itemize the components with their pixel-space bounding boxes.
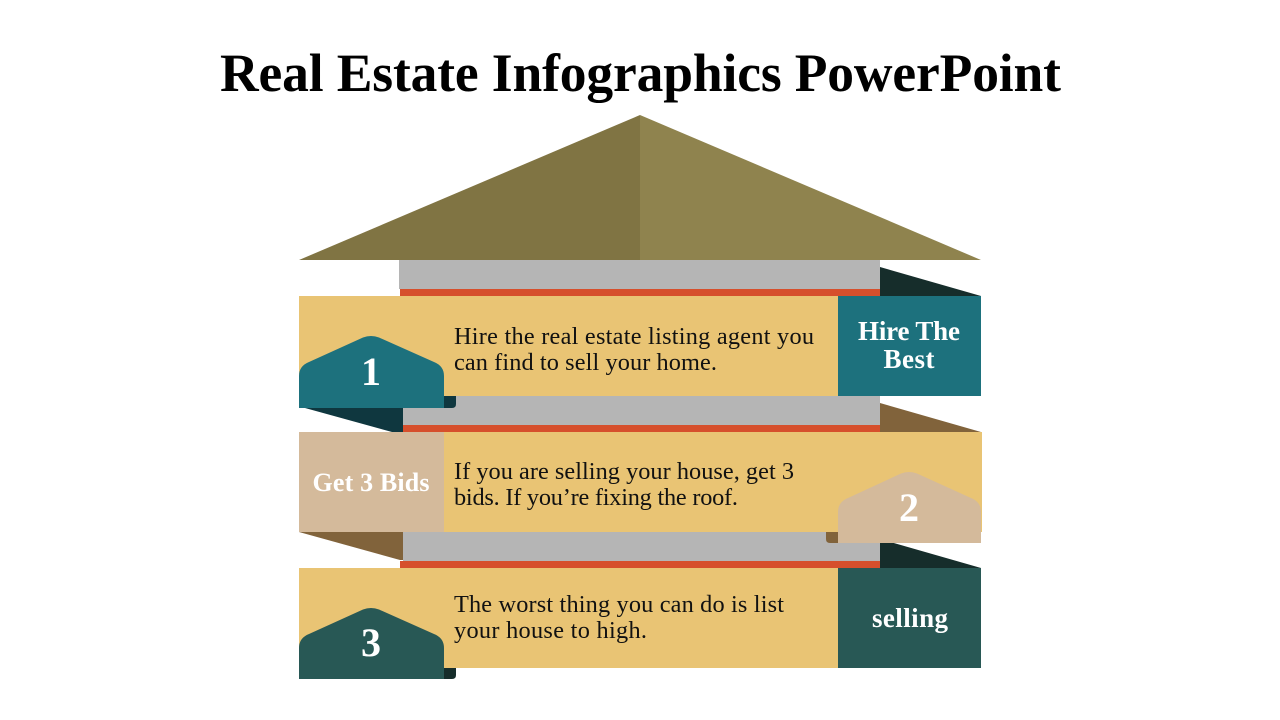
- wall section 1: [399, 260, 981, 296]
- ribbon band 1: [299, 296, 838, 396]
- step 3 description: [454, 591, 784, 644]
- label box: Get 3 Bids: Get 3 Bids: [312, 468, 430, 497]
- ribbon band 2: [444, 432, 982, 532]
- ribbon fold 1: [444, 396, 456, 408]
- label box: Hire The Best: Hire The: [858, 316, 960, 346]
- badge 3: [299, 608, 444, 679]
- ribbon fold 3: [444, 668, 456, 679]
- panel: step 3: [299, 568, 981, 679]
- step 2 description: bids. If you’re fixing the roof.: [454, 484, 738, 511]
- step 2 description: [454, 458, 794, 511]
- step 2 description: If you are selling your house, get 3: [454, 458, 794, 485]
- wall section 2: [305, 396, 981, 432]
- label box: Get 3 Bids: [299, 432, 444, 532]
- badge 2: [838, 472, 981, 543]
- step 1 description: Hire the real estate listing agent you: [454, 323, 814, 350]
- step 3 description: your house to high.: [454, 617, 647, 644]
- step 3 description: The worst thing you can do is list: [454, 591, 784, 618]
- ribbon fold 2: [826, 532, 838, 543]
- step 1 description: can find to sell your home.: [454, 349, 717, 376]
- label box: Hire The Best: [838, 296, 981, 396]
- badge 1: 1: [361, 349, 381, 394]
- ribbon band 3: [299, 568, 838, 668]
- badge 2: 2: [899, 485, 919, 530]
- title: Real Estate Infographics PowerPoint: [220, 43, 1061, 103]
- step 1 description: [454, 323, 814, 376]
- panel: step 1: [299, 296, 981, 408]
- label box: selling: selling: [872, 603, 948, 633]
- badge 3: 3: [361, 620, 381, 665]
- panel: step 2: [299, 432, 982, 543]
- badge 1: [299, 336, 444, 408]
- label box: selling: [838, 568, 981, 668]
- wall section 3: [299, 532, 981, 568]
- house illustration: [299, 115, 981, 568]
- label box: Hire The Best: Best: [884, 344, 934, 374]
- roof: [299, 115, 981, 260]
